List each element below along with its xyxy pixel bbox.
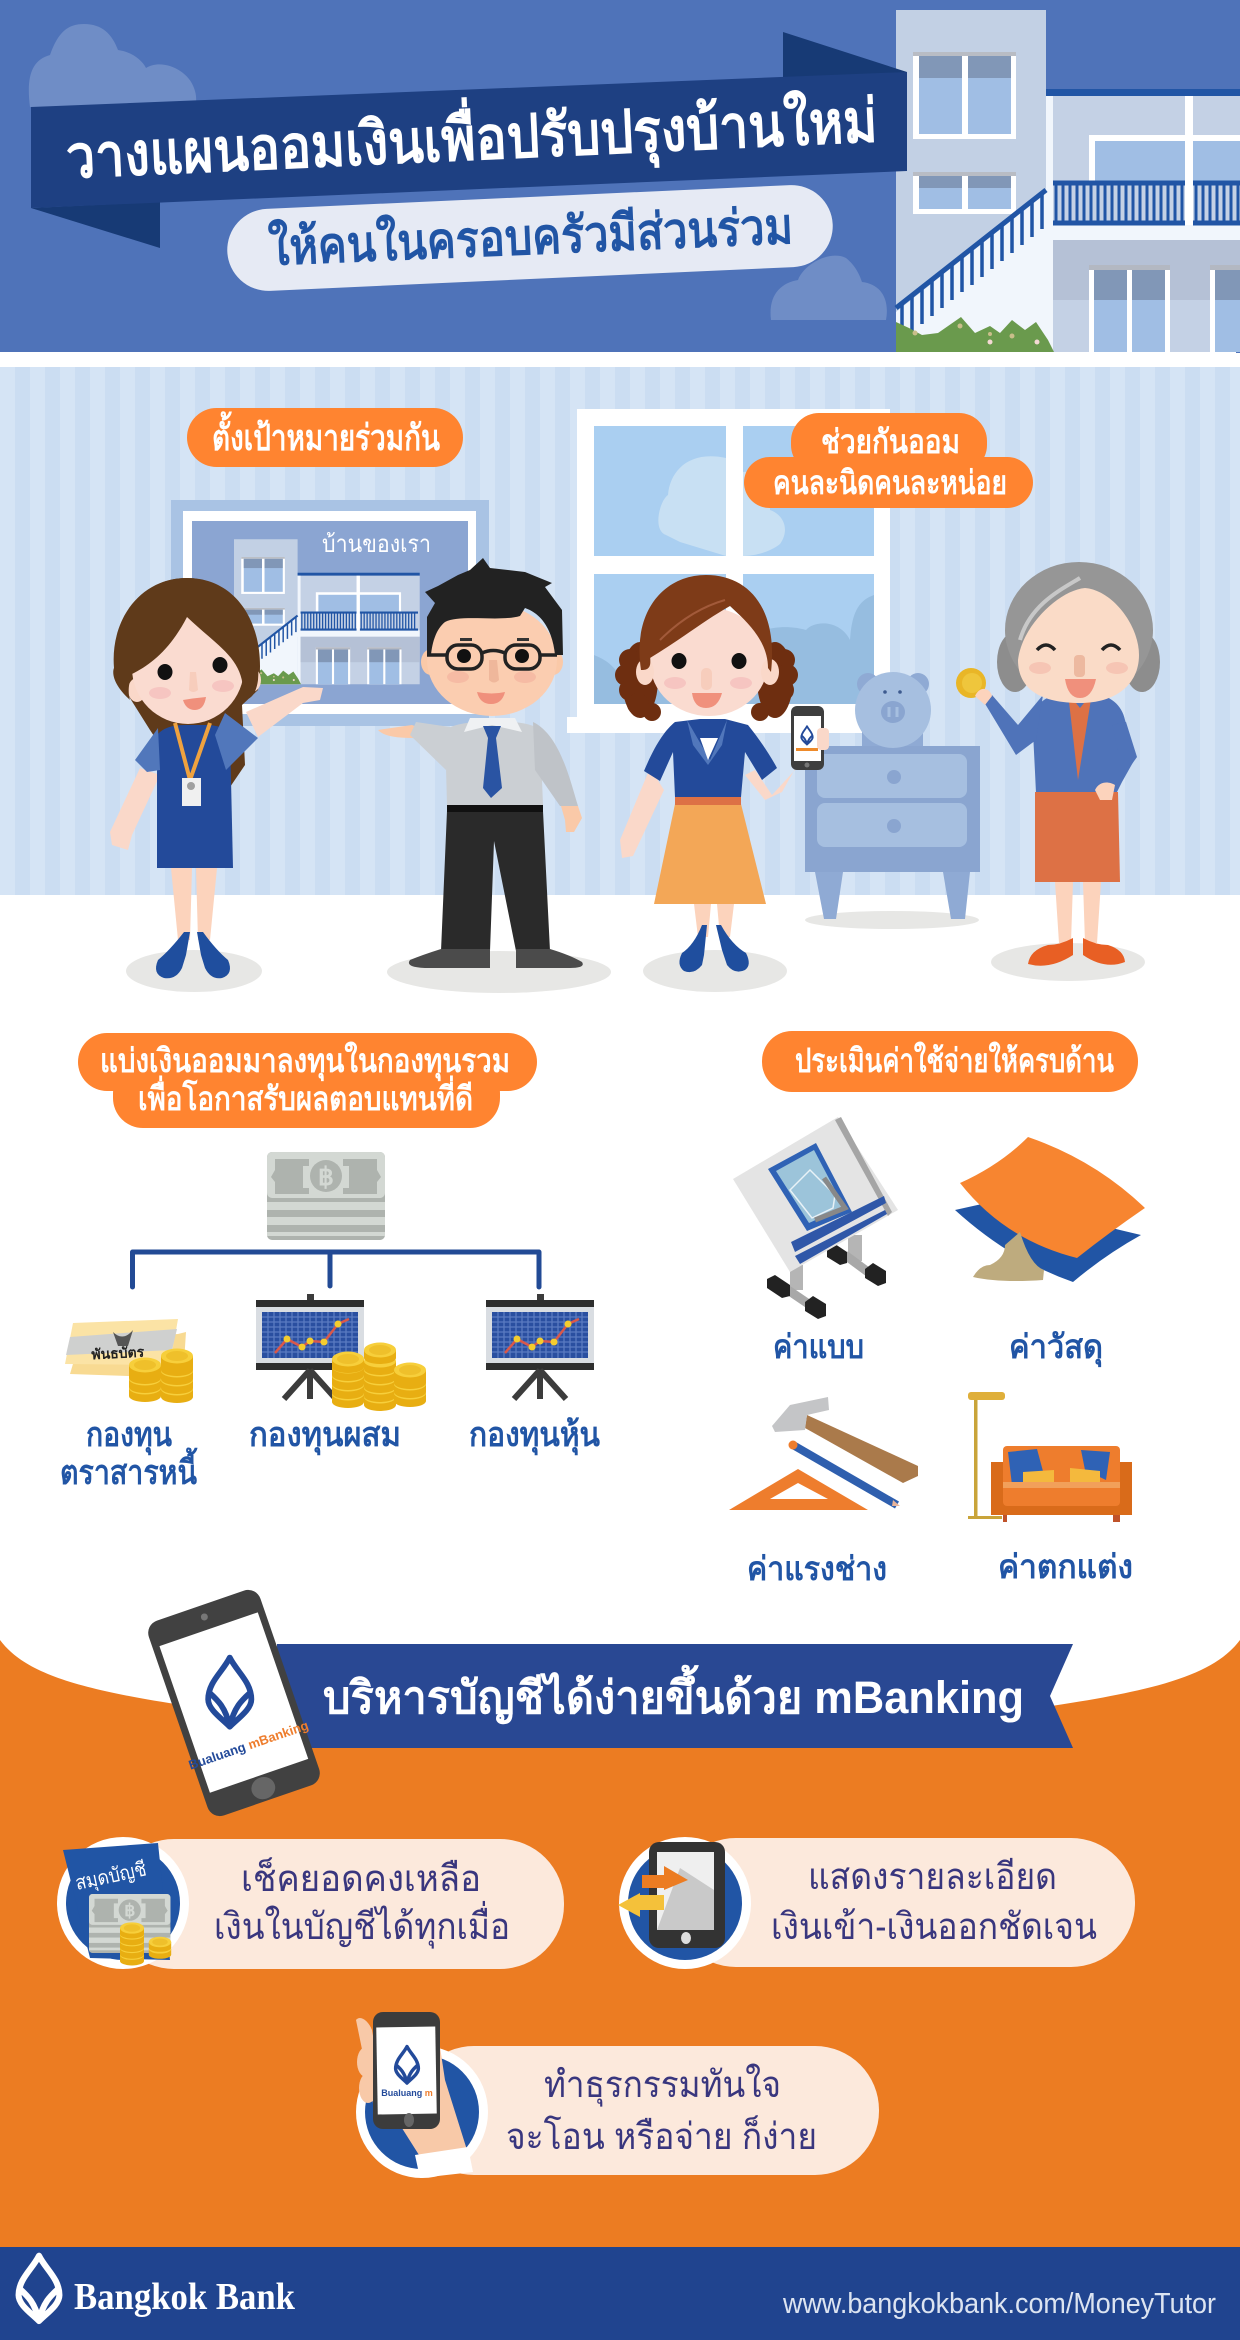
icon: large phone xyxy=(141,1585,327,1821)
icon: phone in hand xyxy=(791,706,829,770)
subtitle: ให้คนในครอบครัวมีส่วนร่วม xyxy=(267,197,794,276)
character: man with tie xyxy=(378,558,583,968)
character: bank officer woman xyxy=(110,578,323,978)
floor shadows xyxy=(126,911,1145,993)
footer xyxy=(0,2247,1240,2340)
card: transaction details: แสดงรายละเอียด xyxy=(808,1856,1057,1897)
icon: drafting table xyxy=(733,1117,898,1319)
pill: shared goal xyxy=(187,408,463,467)
icon: money stack xyxy=(267,1152,385,1240)
panel: mBanking section xyxy=(0,1585,1240,2340)
label: decoration cost: ค่าตกแต่ง xyxy=(998,1548,1133,1585)
icon: large phone: Bualuang mBanking xyxy=(187,1718,310,1773)
icon: phone with arrows xyxy=(618,1842,725,1948)
pill: saving together xyxy=(744,413,1033,508)
icon: material bags xyxy=(955,1137,1145,1282)
card: check balance: เช็คยอดคงเหลือ xyxy=(241,1855,481,1899)
label: equity fund: กองทุนหุ้น xyxy=(469,1416,600,1456)
icon: piggy bank xyxy=(855,672,931,748)
mBanking ribbon xyxy=(277,1644,1073,1748)
website url: www.bangkokbank.com/MoneyTutor xyxy=(782,2288,1216,2320)
title ribbon xyxy=(31,32,907,248)
pill: mutual funds heading xyxy=(78,1033,537,1128)
section: estimate costs xyxy=(729,1031,1145,1587)
icon: chart (equity fund) xyxy=(486,1294,594,1399)
room scene xyxy=(0,367,1240,895)
label: bond fund xyxy=(60,1416,198,1492)
card: transaction details xyxy=(618,1837,1135,1969)
building illustration xyxy=(896,10,1240,352)
label: bond fund: กองทุน xyxy=(86,1416,172,1456)
label: labour cost: ค่าแรงช่าง xyxy=(747,1550,887,1587)
icon: Bangkok Bank logo xyxy=(19,2256,59,2321)
card: check balance: เงินในบัญชีได้ทุกเมื่อ xyxy=(214,1900,510,1949)
icon: passbook: สมุดบัญชี xyxy=(73,1858,149,1896)
subtitle pill xyxy=(225,183,835,293)
picture caption: บ้านของเรา xyxy=(322,531,431,558)
mini house xyxy=(234,539,420,684)
card: transaction details: เงินเข้า-เงินออกชัดเจน xyxy=(771,1906,1097,1947)
connector tree xyxy=(132,1252,539,1287)
icon: passbook xyxy=(63,1843,171,1966)
card: instant transactions: ทำธุรกรรมทันใจ xyxy=(544,2063,781,2107)
pill: shared goal: ตั้งเป้าหมายร่วมกัน xyxy=(212,411,440,458)
title: วางแผนออมเงินเพื่อปรับปรุงบ้านใหม่ xyxy=(64,78,879,195)
brand name: Bangkok Bank xyxy=(74,2276,296,2318)
section: investing in mutual funds xyxy=(60,1033,600,1492)
card: instant transactions xyxy=(356,2012,879,2178)
pill: saving together: คนละนิดคนละหน่อย xyxy=(773,464,1007,501)
cabinet with piggy bank xyxy=(805,672,980,919)
card: check balance xyxy=(57,1837,564,1969)
striped wall xyxy=(0,367,1240,895)
character: grandmother with coin xyxy=(956,562,1160,966)
icon: hand holding phone: Bualuang m xyxy=(381,2088,433,2098)
icon: chart with coins (mixed fund) xyxy=(256,1294,426,1411)
label: mixed fund: กองทุนผสม xyxy=(249,1416,401,1456)
icon: cloud left xyxy=(29,24,196,107)
pill: saving together: ช่วยกันออม xyxy=(821,423,960,460)
icon: bonds with coins: พันธบัตร xyxy=(91,1344,145,1362)
icon: sofa and lamp xyxy=(968,1392,1132,1522)
icon: cloud right xyxy=(771,256,887,320)
icon: bonds with coins xyxy=(65,1319,193,1403)
header panel xyxy=(0,0,1240,353)
orange background xyxy=(0,1640,1240,2340)
character: woman with phone xyxy=(615,575,829,972)
mBanking ribbon: บริหารบัญชีได้ง่ายขึ้นด้วย mBanking xyxy=(323,1664,1024,1724)
window xyxy=(567,409,890,733)
white strip xyxy=(0,352,1236,367)
pill: costs heading: ประเมินค่าใช้จ่ายให้ครบด้าน xyxy=(795,1041,1114,1079)
card: instant transactions: จะโอน หรือจ่าย ก็ง่าย xyxy=(506,2113,817,2157)
icon: hammer pencil and set square xyxy=(729,1397,918,1510)
label: materials cost: ค่าวัสดุ xyxy=(1009,1328,1103,1368)
pill: mutual funds heading: แบ่งเงินออมมาลงทุนในกองทุนรวม xyxy=(100,1041,510,1082)
pill: mutual funds heading: เพื่อโอกาสรับผลตอบแทนที่ดี xyxy=(138,1075,473,1117)
pill: costs heading xyxy=(762,1031,1138,1092)
label: bond fund: ตราสารหนี้ xyxy=(60,1447,198,1492)
framed picture xyxy=(171,500,489,726)
label: design cost: ค่าแบบ xyxy=(773,1328,864,1365)
icon: hand holding phone xyxy=(356,2012,473,2178)
